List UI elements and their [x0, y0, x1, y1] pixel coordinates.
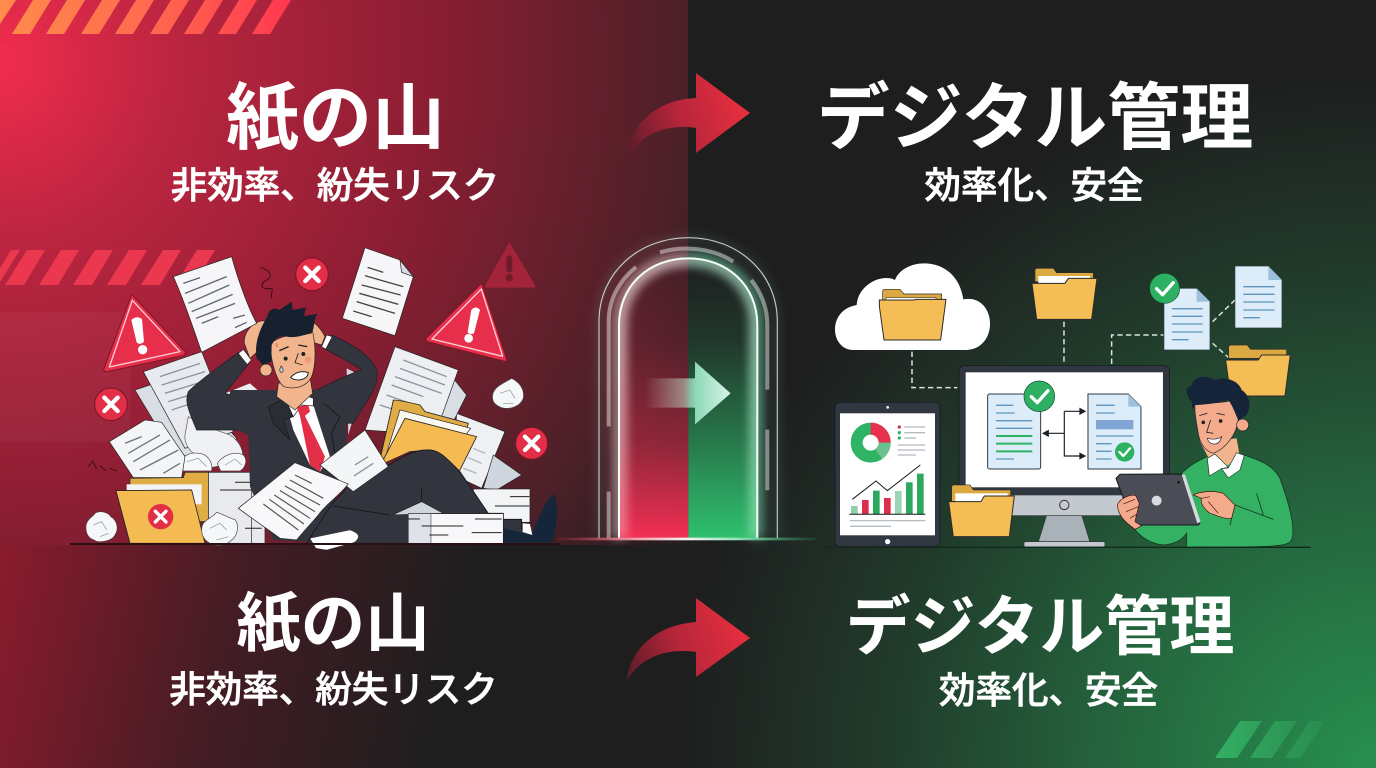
portal inner bright arch [619, 258, 757, 538]
portal left interior [619, 258, 688, 538]
legend lines [898, 425, 925, 455]
stack of papers behind right [225, 347, 522, 490]
worker: torso and arms [187, 318, 377, 430]
title: paper mountain top: 紙の山 [226, 78, 445, 159]
sheet: flying paper left [173, 257, 257, 352]
floor stack of papers [408, 514, 503, 544]
hands [244, 321, 269, 358]
facial features [1199, 413, 1225, 444]
arrow: top curved red arrow [627, 73, 750, 158]
title: digital management bottom: デジタル管理 [846, 590, 1234, 663]
left arm [187, 353, 270, 430]
decorative green stripes bottom right [1215, 721, 1325, 758]
paper stacks on floor [208, 472, 530, 543]
icon: folder top [1032, 268, 1097, 319]
screen document left [988, 381, 1055, 469]
portal arrow [645, 362, 731, 424]
screen document right [1088, 394, 1141, 469]
portal dashed mid ring [609, 249, 767, 538]
ear [1237, 419, 1249, 431]
worker: head and hair [256, 302, 317, 410]
icon: folder at monitor [949, 485, 1014, 537]
monitor [959, 366, 1170, 547]
sheet: left mid paper [109, 420, 185, 478]
portal outer thin arch [599, 238, 777, 538]
neck and collar [1200, 438, 1244, 478]
decorative hazard stripes middle [0, 250, 215, 285]
icon: cloud with folder [835, 263, 990, 350]
tablet with dashboard [835, 402, 940, 547]
illustration: overwhelmed worker with paper pile [86, 242, 557, 550]
hands [1117, 491, 1235, 529]
worker: legs and shoe [307, 450, 557, 550]
subtitle: efficiency and safety top: 効率化、安全 [924, 165, 1144, 206]
portal inner edge glow [619, 258, 757, 538]
stack of papers behind left [135, 352, 243, 468]
panel: paper mountain background [0, 0, 688, 768]
subtitle: inefficiency and loss risk bottom: 非効率、紛失リスク [169, 669, 498, 710]
crumpled paper balls [86, 378, 524, 545]
illustration: digital workspace [820, 263, 1311, 547]
donut chart [857, 429, 885, 457]
portal right interior [688, 258, 757, 538]
man with tablet [1116, 377, 1293, 547]
arrow: bottom curved red arrow [627, 598, 750, 680]
subtitle: efficiency and safety bottom: 効率化、安全 [939, 670, 1158, 711]
title: digital management top: デジタル管理 [817, 78, 1253, 159]
portal outer glow [599, 238, 777, 538]
cuffs [238, 335, 332, 365]
held tablet [1116, 474, 1201, 525]
hair [1187, 377, 1249, 420]
subtitle: inefficiency and loss risk top: 非効率、紛失リスク [171, 165, 499, 206]
sheet: flying paper right [342, 248, 413, 336]
front paper sheets [238, 430, 388, 540]
portal base line [557, 538, 817, 540]
icon: yellow folder left with error [116, 472, 208, 543]
ground line left [70, 543, 560, 545]
icon: faint warning triangle [485, 242, 535, 288]
bar chart [849, 465, 925, 526]
face [1195, 400, 1238, 453]
icon: warning triangle left [104, 294, 185, 372]
stress squiggles [88, 268, 272, 471]
icon: error circle top [296, 258, 328, 291]
icon: document with check [1150, 273, 1210, 350]
icon: yellow folder right [380, 400, 477, 473]
panel: digital management background [688, 0, 1376, 768]
icon: warning triangle right [426, 283, 507, 361]
decorative hazard stripes top [0, 0, 291, 34]
right arm [310, 335, 377, 423]
ground line right [820, 545, 1311, 549]
icon: folder right [1226, 345, 1290, 396]
sweater [1133, 455, 1293, 547]
dashed connectors [912, 300, 1235, 388]
portal: glowing arch transition [557, 238, 817, 540]
title: paper mountain bottom: 紙の山 [236, 588, 430, 660]
icon: error circle right [516, 427, 548, 459]
worker: suit body [230, 390, 347, 542]
screen sync arrows [1043, 409, 1085, 459]
icon: error circle left [95, 388, 127, 421]
icon: document top right [1235, 266, 1282, 328]
